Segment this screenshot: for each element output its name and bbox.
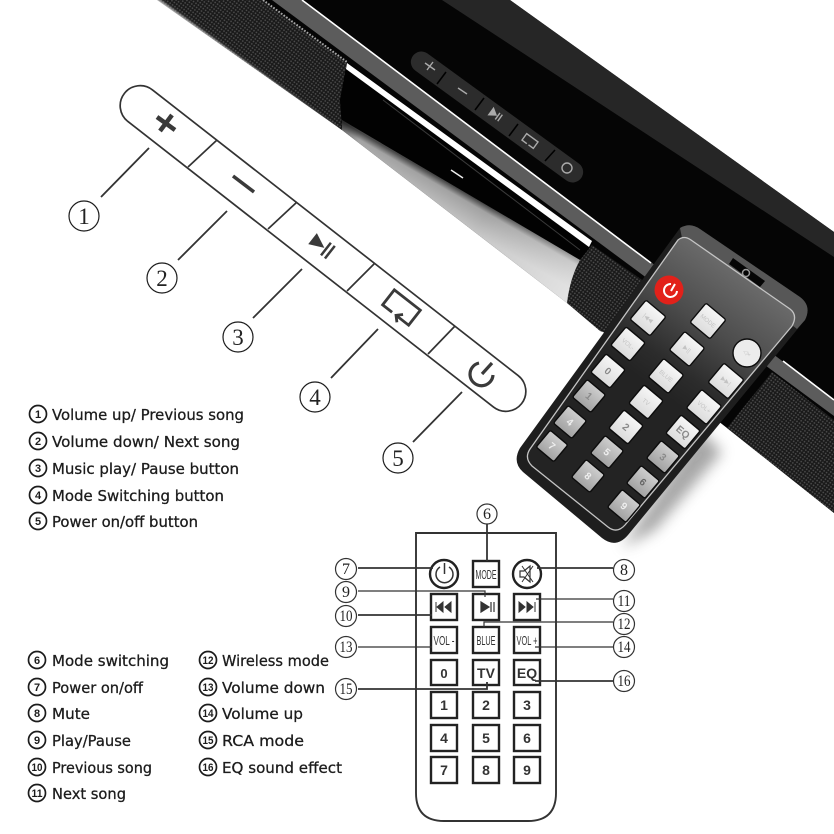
metal lip [272,0,834,416]
callout 7: 7 [342,561,350,578]
remote keys: |◀◀ [641,313,654,325]
key: 9 [514,757,540,783]
button strip diagram [69,78,534,473]
callout 7 [336,558,433,580]
legend: soundbar buttons [30,406,244,531]
key: 1: 1 [440,697,448,713]
remote keys: 4 [564,417,575,429]
key: blue: BLUE [476,633,496,648]
callout 10 [336,606,432,626]
key: 0 [431,660,457,685]
item 3: Music play/ Pause button [52,460,239,478]
callout 15 [336,678,487,700]
icon: mode switch [380,290,420,329]
remote keys: 5 [601,447,612,459]
item 9: 9 [34,735,40,747]
item 1: 1 [35,409,41,421]
key: blue [473,627,499,653]
remote face [527,238,795,530]
item 14: 14 [202,708,214,720]
callout 5 [383,392,462,473]
mute button: ◁× [741,349,752,359]
key: mute [513,560,541,588]
white edge highlight right [783,361,834,400]
callout 14: 14 [618,639,630,656]
inner reflection line [383,100,580,250]
remote outline [416,533,556,821]
item 7: 7 [34,682,40,694]
item 15: RCA mode [222,732,304,750]
callout 8: 8 [620,562,628,579]
callout 6: 6 [483,506,491,523]
key: next [514,594,540,620]
callout 14 [535,636,634,658]
soundbar top strip [442,0,834,257]
callout 5: 5 [392,446,404,471]
item 6: Mode switching [52,652,169,670]
strip icons [425,62,572,173]
item 3: 3 [35,463,41,475]
IR window notch [729,258,765,287]
callout 13 [336,636,432,658]
key: 8: 8 [482,762,490,778]
key: power [430,560,458,588]
item 5: Power on/off button [52,513,198,531]
strip dividers [437,72,555,161]
remote keys: VOL+ [695,400,712,415]
item 12: 12 [202,655,214,667]
callout 2: 2 [156,266,168,291]
item 13: 13 [202,682,214,694]
minus mark on front [451,170,463,178]
item 16: EQ sound effect [222,759,342,777]
grille dotted top edge [263,0,347,62]
callout 15: 15 [340,681,352,698]
item 2: Volume down/ Next song [52,433,240,451]
grille soft lower edge [150,0,336,130]
remote keys: BLUE [657,369,673,384]
key: 5 [473,725,499,751]
key: 7: 7 [440,762,448,778]
key: 2: 2 [482,697,490,713]
centre speaker grille [567,245,645,345]
remote keys: ▶|| [681,345,692,355]
callout 1 [69,148,149,231]
key: vol minus [431,627,457,653]
capsule outline [112,78,534,419]
remote keys [536,300,744,523]
key: EQ [514,660,540,685]
left speaker grille [157,0,347,130]
callout 6 [477,504,497,561]
callout 12: 12 [618,616,630,633]
item 11: Next song [52,785,126,803]
remote keys: VOL- [620,338,635,352]
callout 8 [537,560,634,580]
item 4: Mode Switching button [52,487,224,505]
icon: plus [157,115,175,131]
black glossy front [340,62,593,260]
icon: play pause [308,232,335,258]
item 4: 4 [35,490,42,502]
remote keys: 8 [582,471,593,483]
callout 11: 11 [618,593,630,610]
remote shadow [622,430,722,548]
key: EQ: EQ [517,665,537,681]
key: 6: 6 [523,730,531,746]
item 1: Volume up/ Previous song [52,406,244,424]
key: 5: 5 [482,730,490,746]
remote keys: 1 [583,391,594,403]
key: mode [473,561,499,587]
item 13: Volume down [222,679,325,697]
item 12: Wireless mode [222,652,329,670]
icon: power [470,363,493,386]
key: 8 [473,757,499,783]
item 2: 2 [35,436,41,448]
remote line diagram [336,504,634,821]
touch button strip [407,47,587,187]
chrome end shading [342,120,580,303]
item 10: 10 [32,762,42,774]
white edge highlight [302,0,651,263]
item 10: Previous song [52,759,152,777]
remote keys: 0 [602,366,613,378]
callout 10: 10 [340,608,352,625]
item 15: 15 [202,735,214,747]
remote keys: 6 [637,477,648,489]
callout 3: 3 [232,325,244,350]
remote keys: 3 [657,452,668,464]
icon: minus [233,176,254,192]
remote body [517,225,808,543]
item 8 [28,704,90,723]
soundbar body [157,0,834,513]
key: 9: 9 [523,762,531,778]
remote keys: TV [640,398,650,408]
remote keys: MODE [699,314,716,330]
remote control photo [517,225,808,543]
callout 9 [336,582,485,602]
remote keys: 9 [618,501,629,513]
key: 4: 4 [440,730,448,746]
item 7: Power on/off [52,679,143,697]
key: 3: 3 [523,697,531,713]
key: 0: 0 [440,666,448,681]
key: vol plus: VOL + [516,633,538,648]
chrome reflection [342,120,580,303]
item 5: 5 [35,516,41,528]
remote keys: 2 [620,422,631,434]
mute button [733,339,761,367]
remote keys: EQ [673,424,692,442]
soundbar photo [150,0,834,513]
callout 9: 9 [342,584,350,601]
callout 4 [300,329,378,412]
key: play pause [473,594,499,620]
key: previous [431,594,457,620]
callout 3 [223,269,302,352]
item 14: Volume up [222,705,303,723]
callout 4: 4 [309,385,321,410]
legend: remote keys column 1 [28,652,169,803]
item 8: 8 [34,708,40,720]
key: 1 [431,692,457,718]
callout 13: 13 [340,639,352,656]
key: TV [473,660,499,685]
key: TV: TV [477,665,496,681]
callout 16: 16 [618,673,630,690]
callout 1: 1 [78,204,90,229]
callout 12 [484,614,634,634]
item 6: 6 [34,655,40,667]
key: 2 [473,692,499,718]
key: vol minus: VOL - [434,633,454,648]
remote top lip [680,225,808,329]
key: 4 [431,725,457,751]
remote keys: 7 [546,441,557,453]
key: 6 [514,725,540,751]
item 16: 16 [202,762,214,774]
legend: remote keys column 2 [200,652,342,777]
key: 3 [514,692,540,718]
white reflection strip [346,63,592,247]
callout 16 [535,670,634,692]
key: vol plus [514,627,540,653]
red power button [654,276,684,304]
capsule dividers [188,140,455,354]
remote keys: ▶▶| [719,376,732,388]
item 9: Play/Pause [52,732,131,750]
callout 11 [536,590,634,612]
key: 7 [431,757,457,783]
callout 2 [147,211,227,293]
item 11: 11 [32,788,42,800]
item 8: Mute [52,705,90,723]
right speaker grille [727,372,834,513]
key: mode: MODE [476,567,497,582]
